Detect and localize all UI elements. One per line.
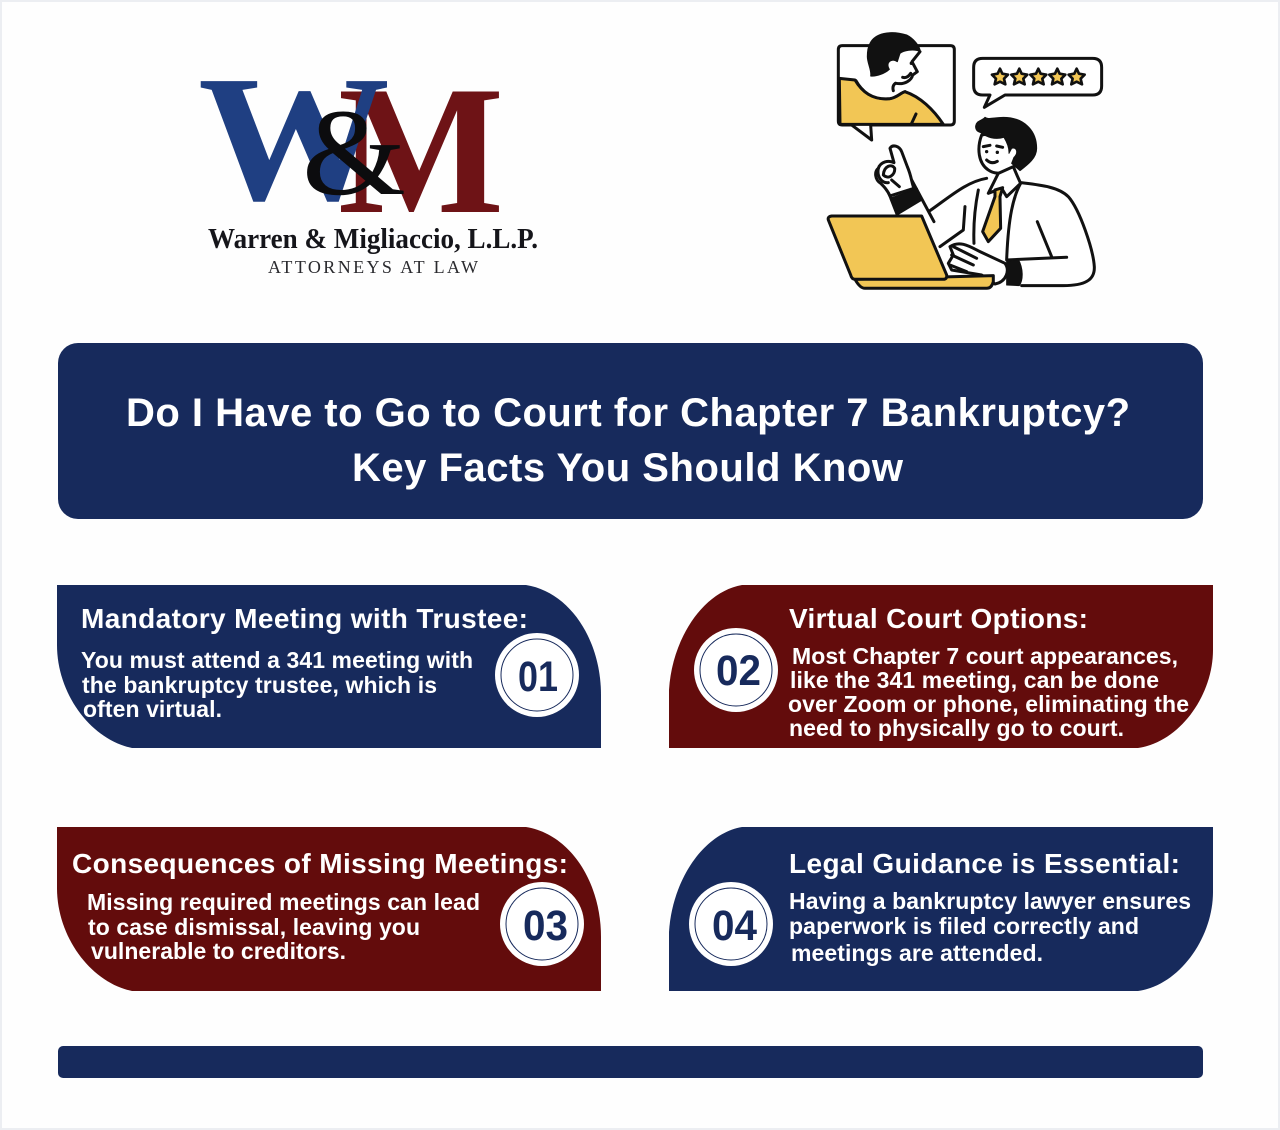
laptop	[828, 216, 993, 288]
number badge 01: 01	[518, 653, 558, 701]
panel 01: mandatory meeting	[57, 585, 601, 748]
video call window with speech tail	[838, 33, 954, 140]
body 02	[788, 643, 1189, 741]
logo monogram ampersand: &	[302, 84, 406, 221]
number badge 04	[689, 882, 773, 966]
body 04: meetings are attended.	[791, 940, 1043, 966]
body 04	[789, 888, 1191, 966]
body 01: You must attend a 341 meeting with	[81, 647, 473, 673]
panel 04: legal guidance	[669, 827, 1213, 991]
body 04: Having a bankruptcy lawyer ensures	[789, 888, 1191, 914]
body 02: like the 341 meeting, can be done	[790, 667, 1159, 693]
title banner	[58, 343, 1203, 519]
heading 04: Legal Guidance is Essential:	[789, 848, 1180, 879]
logo: Warren & Migliaccio	[198, 39, 538, 277]
rating speech bubble with five stars	[974, 58, 1102, 107]
logo monogram M: M	[338, 48, 504, 252]
panel 03: consequences of missing meetings	[57, 827, 601, 991]
title line 1: Do I Have to Go to Court for Chapter 7 Bankruptcy?	[126, 391, 1130, 435]
logo monogram W: W	[198, 39, 390, 238]
number badge 01	[495, 633, 579, 717]
panel 02: virtual court options	[669, 585, 1213, 748]
body 03: to case dismissal, leaving you	[88, 914, 420, 940]
illustration: man on a video call with a client	[828, 33, 1102, 288]
logo tagline: ATTORNEYS AT LAW	[268, 257, 478, 277]
body 04: paperwork is filed correctly and	[789, 913, 1139, 939]
body 01	[81, 647, 473, 722]
title line 2: Key Facts You Should Know	[352, 446, 904, 490]
number badge 02	[694, 628, 778, 712]
logo firm name: Warren & Migliaccio, L.L.P.	[208, 223, 538, 255]
body 02: Most Chapter 7 court appearances,	[792, 643, 1178, 669]
heading 02: Virtual Court Options:	[789, 603, 1088, 634]
heading 03: Consequences of Missing Meetings:	[72, 848, 568, 879]
body 03: Missing required meetings can lead	[87, 889, 480, 915]
number badge 02: 02	[716, 647, 761, 695]
footer bar	[58, 1046, 1203, 1078]
number badge 04: 04	[712, 902, 757, 950]
body 01: the bankruptcy trustee, which is	[82, 672, 437, 698]
man in shirt and tie at laptop	[876, 117, 1094, 286]
body 01: often virtual.	[83, 696, 222, 722]
body 03: vulnerable to creditors.	[91, 938, 346, 964]
body 02: over Zoom or phone, eliminating the	[788, 691, 1189, 717]
number badge 03: 03	[523, 902, 568, 950]
body 03	[87, 889, 480, 964]
number badge 03	[500, 882, 584, 966]
body 02: need to physically go to court.	[789, 715, 1124, 741]
heading 01: Mandatory Meeting with Trustee:	[81, 603, 528, 634]
